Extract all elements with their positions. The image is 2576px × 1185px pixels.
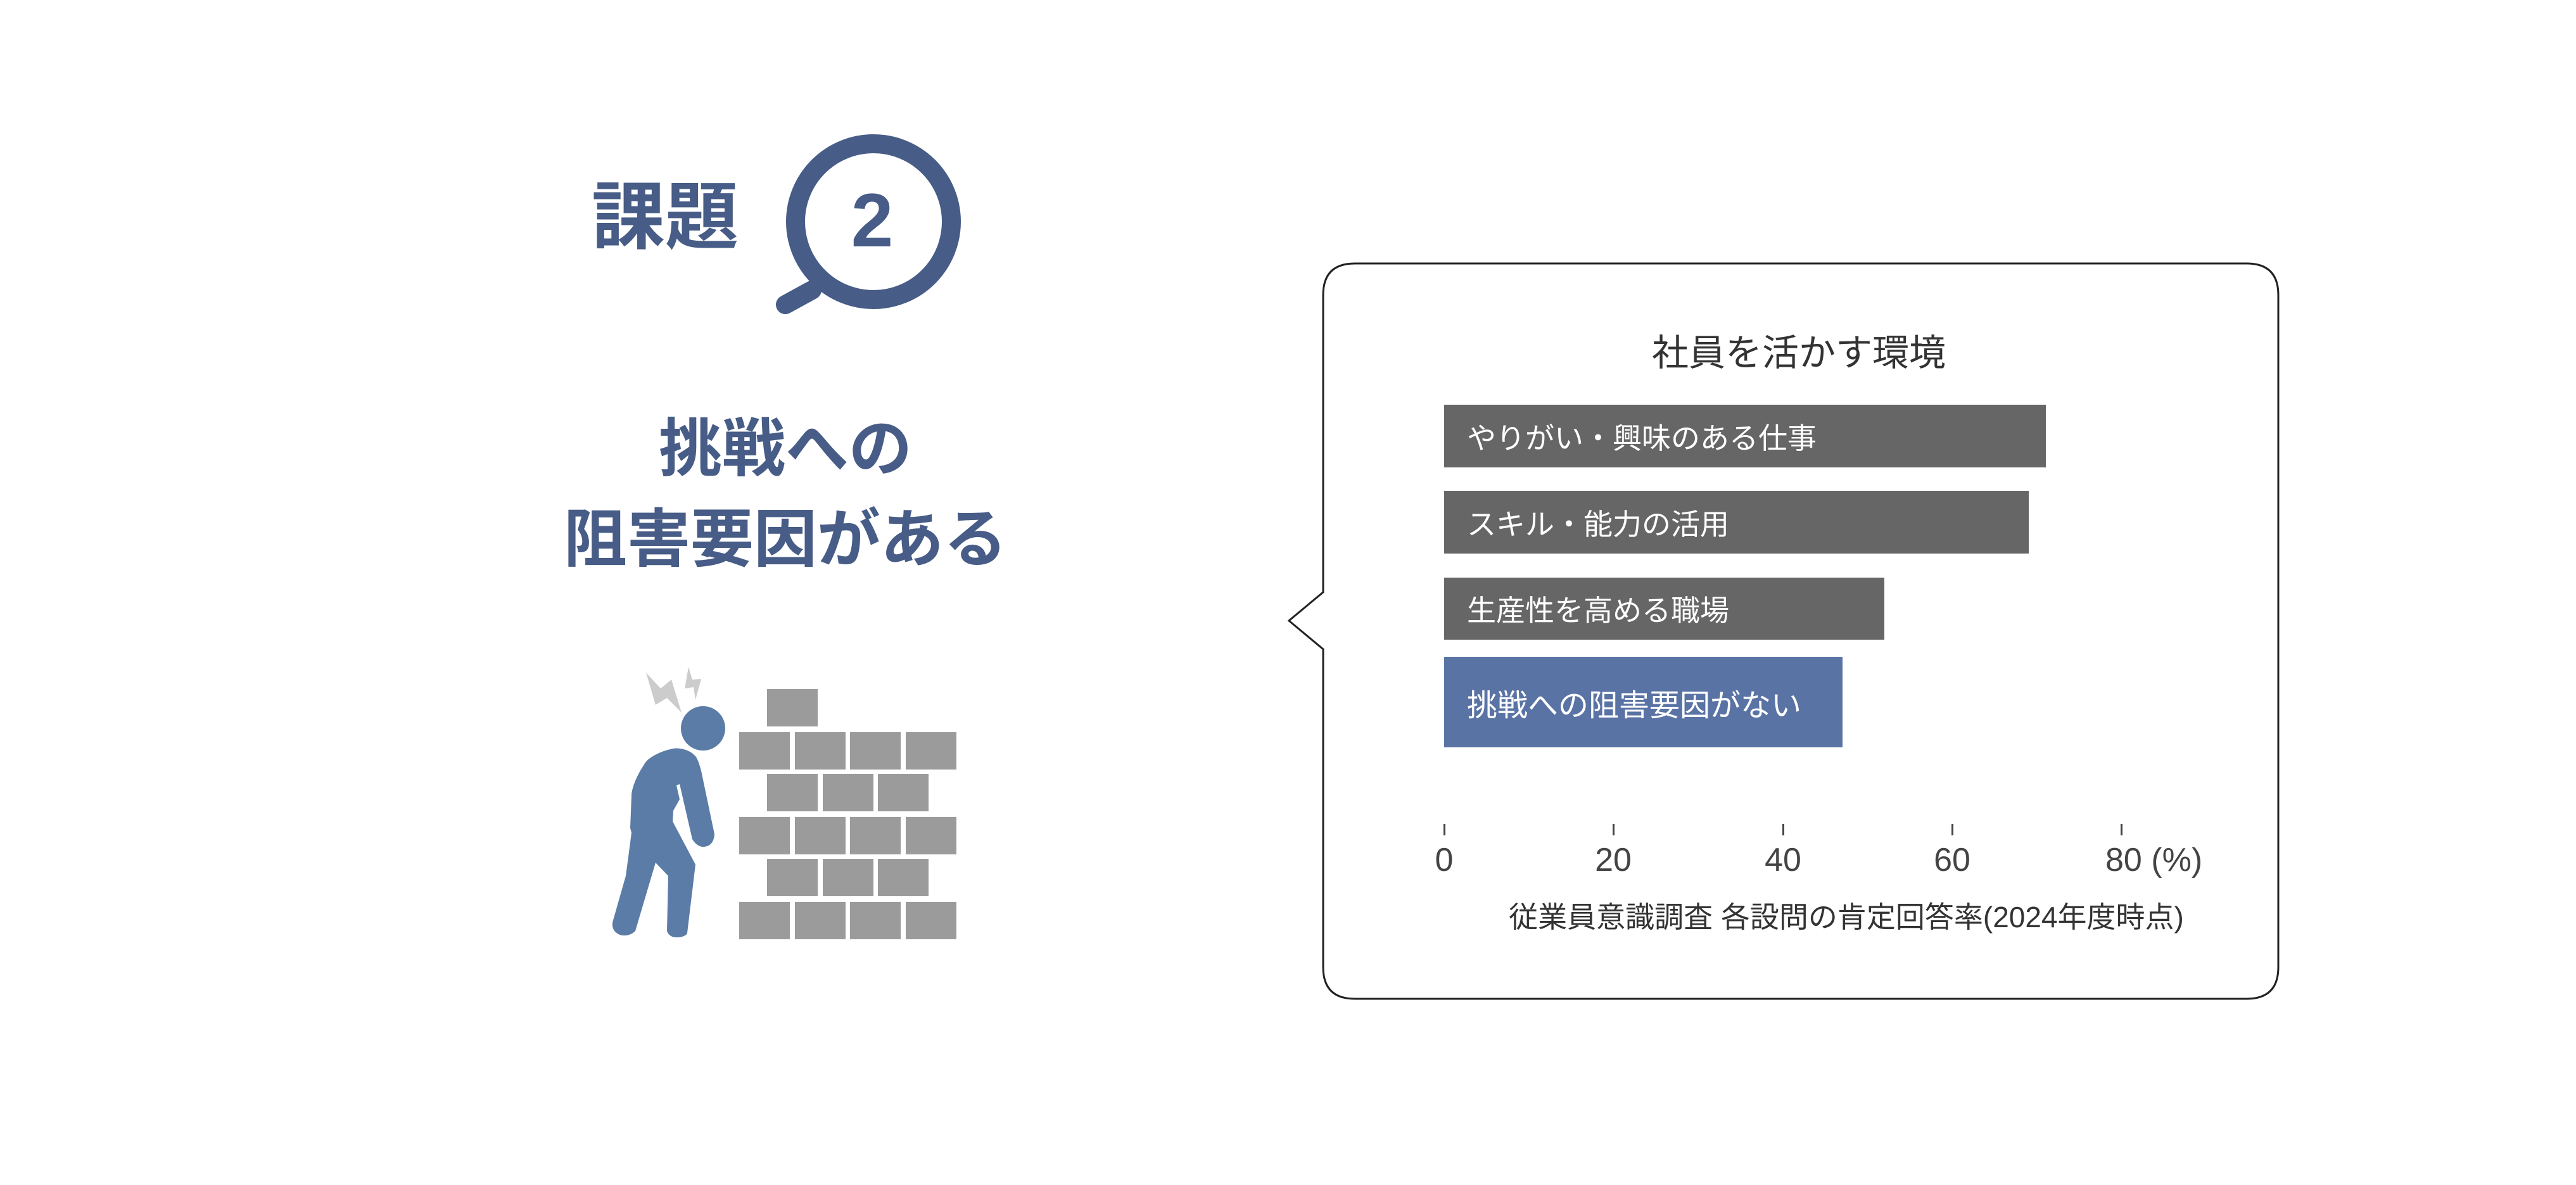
chart title: 社員を活かす環境	[1652, 333, 1946, 374]
bar: やりがい・興味のある仕事	[1444, 405, 2046, 467]
bar: スキル・能力の活用	[1444, 491, 2029, 554]
heading: 挑戦への阻害要因がある: 阻害要因がある	[564, 504, 1007, 575]
bar: 挑戦への阻害要因がない (highlight): 挑戦への阻害要因がない	[1467, 689, 1801, 722]
bar: 生産性を高める職場: 生産性を高める職場	[1467, 594, 1729, 627]
caption: survey source: 従業員意識調査 各設問の肯定回答率(2024年度時点)	[1509, 901, 2184, 934]
axis ticks and labels	[1435, 824, 2202, 878]
bar: やりがい・興味のある仕事: やりがい・興味のある仕事	[1467, 422, 1817, 455]
bar chart: 40	[1765, 842, 1801, 878]
bar chart: 60	[1934, 842, 1970, 878]
bar: スキル・能力の活用: スキル・能力の活用	[1467, 508, 1729, 541]
bar chart: 20	[1595, 842, 1632, 878]
icon: person struggling at brick wall	[612, 668, 956, 939]
bar: 生産性を高める職場	[1444, 578, 1884, 640]
bar chart: 0	[1435, 842, 1453, 878]
bar: 挑戦への阻害要因がない (highlight)	[1444, 657, 1843, 747]
heading: 挑戦への阻害要因がある	[564, 414, 1007, 575]
icon: brick wall	[739, 689, 956, 939]
icon: person	[612, 706, 725, 937]
bar chart: 80 (%)	[2105, 842, 2202, 878]
heading: 挑戦への阻害要因がある: 挑戦への	[659, 414, 912, 485]
icon: magnifier with number 2: 2	[851, 178, 893, 263]
icon: lightning bolts	[646, 667, 701, 713]
icon: magnifier with number 2	[776, 134, 961, 314]
heading: 課題: 課題	[592, 176, 739, 258]
